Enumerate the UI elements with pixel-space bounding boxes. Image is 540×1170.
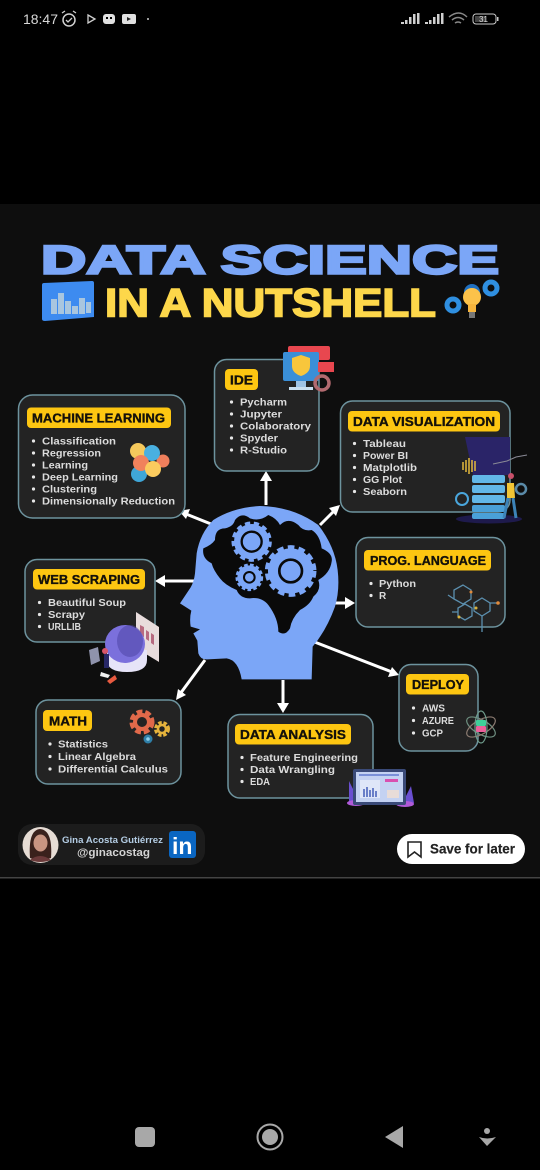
list: machine learning topics: Dimensionally Reduction — [42, 496, 175, 508]
arrow: head to web scraping — [155, 575, 194, 587]
title — [41, 238, 499, 326]
heading: prog language: PROG. LANGUAGE — [370, 553, 486, 568]
list: languages: R — [379, 591, 387, 602]
icon: colored clusters — [130, 443, 170, 482]
list: visualization tools — [353, 439, 417, 498]
icon: brain on platform — [89, 612, 159, 684]
list: analysis topics: Data Wrangling — [250, 765, 335, 776]
icon: monitor with shield — [283, 346, 334, 390]
icon: dashboard tablet — [347, 769, 414, 807]
list: machine learning topics: Regression — [42, 448, 101, 460]
arrow: head to math — [176, 660, 205, 700]
list: math topics: Linear Algebra — [58, 752, 136, 763]
panel: machine learning — [18, 395, 185, 518]
list: IDE tools: Pycharm — [240, 398, 287, 408]
icon: home — [258, 1124, 282, 1150]
list: analysis topics: EDA — [250, 777, 270, 788]
list: languages: Python — [379, 579, 416, 590]
list: IDE tools: Colaboratory — [240, 422, 311, 432]
arrow: head to machine learning — [179, 509, 211, 524]
panel: data visualization — [340, 401, 527, 524]
list: math topics: Statistics — [58, 740, 108, 750]
list: machine learning topics: Clustering — [42, 484, 97, 496]
status bar: 31 — [479, 15, 488, 24]
save for later button — [397, 834, 525, 864]
navigation bar — [135, 1124, 496, 1150]
heading: machine learning: MACHINE LEARNING — [32, 410, 165, 426]
icon: linkedin: in — [172, 833, 192, 859]
list: scraping tools: URLLIB — [48, 622, 81, 633]
avatar photo — [22, 827, 58, 863]
list: analysis topics — [240, 753, 358, 788]
list: machine learning topics: Deep Learning — [42, 472, 118, 484]
author name: Gina Acosta Gutiérrez — [62, 835, 163, 846]
poster background — [0, 204, 540, 878]
list: deploy platforms: AZURE — [422, 716, 454, 727]
icon: data servers and analyst — [456, 437, 527, 524]
icon: bookmark — [408, 842, 421, 857]
list: languages — [369, 579, 416, 602]
list: machine learning topics: Classification — [42, 436, 116, 448]
panel: data analysis — [228, 714, 414, 807]
heading: data analysis — [235, 724, 351, 744]
list: visualization tools: Power BI — [363, 451, 408, 462]
status bar — [23, 11, 498, 27]
title: IN A NUTSHELL — [105, 282, 436, 326]
heading: prog language — [364, 550, 491, 570]
list: IDE tools — [230, 398, 311, 456]
list: IDE tools: Jupyter — [240, 410, 282, 420]
list: visualization tools: Matplotlib — [363, 463, 417, 474]
heading: data visualization: DATA VISUALIZATION — [353, 414, 495, 429]
status bar: 18:47 — [23, 11, 58, 27]
list: machine learning topics — [32, 436, 175, 508]
list: math topics — [48, 740, 168, 776]
list: scraping tools — [38, 598, 126, 633]
save for later button: Save for later — [430, 840, 516, 856]
icon: atom with database — [464, 711, 498, 743]
heading: math: MATH — [49, 714, 87, 728]
list: scraping tools: Scrapy — [48, 610, 85, 621]
heading: data analysis: DATA ANALYSIS — [240, 727, 346, 742]
heading: math — [43, 710, 92, 731]
heading: IDE: IDE — [230, 372, 253, 388]
arrow: head to data visualization — [320, 505, 340, 525]
icon: recent apps — [135, 1127, 155, 1147]
author badge — [18, 824, 205, 865]
panel: web scraping — [25, 560, 159, 684]
arrow: head to deploy — [312, 641, 399, 677]
icon: accessibility — [479, 1128, 496, 1146]
list: visualization tools: GG Plot — [363, 475, 403, 486]
icon: gears — [133, 713, 168, 744]
arrow: head to IDE — [260, 471, 272, 505]
list: deploy platforms: GCP — [422, 728, 443, 740]
list: visualization tools: Tableau — [363, 439, 406, 450]
gear: small — [237, 565, 262, 590]
panel: IDE — [214, 346, 334, 471]
panel: prog language — [356, 538, 505, 632]
list: analysis topics: Feature Engineering — [250, 753, 358, 764]
heading: data visualization — [348, 411, 500, 432]
heading: deploy: DEPLOY — [412, 677, 464, 692]
arrow: head to data analysis — [277, 680, 289, 713]
list: IDE tools: R-Studio — [240, 446, 287, 456]
heading: machine learning — [27, 408, 171, 428]
panel: deploy — [399, 664, 498, 751]
icon: bar chart window — [42, 281, 94, 321]
icon: light bulb and gears — [447, 282, 497, 318]
heading: web scraping: WEB SCRAPING — [38, 572, 140, 587]
gear: upper — [233, 523, 270, 560]
list: deploy platforms — [412, 704, 454, 740]
icon: back — [385, 1126, 403, 1148]
gear: large — [267, 547, 315, 595]
head with gears — [180, 506, 338, 679]
list: deploy platforms: AWS — [422, 704, 445, 714]
list: math topics: Differential Calculus — [58, 764, 168, 776]
list: scraping tools: Beautiful Soup — [48, 598, 126, 609]
list: visualization tools: Seaborn — [363, 487, 407, 498]
arrow: head to prog language — [330, 597, 355, 609]
icon: molecule network — [448, 585, 500, 632]
panel: math — [36, 700, 181, 784]
list: machine learning topics: Learning — [42, 460, 88, 472]
title: DATA SCIENCE — [41, 238, 499, 282]
author handle: @ginacostag — [77, 847, 150, 859]
list: IDE tools: Spyder — [240, 434, 278, 444]
